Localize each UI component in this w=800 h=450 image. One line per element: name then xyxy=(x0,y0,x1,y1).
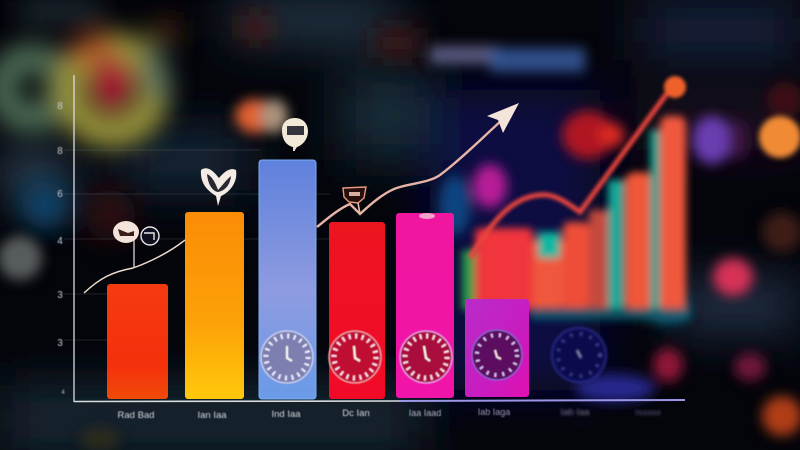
x axis labels: Ind Iaa xyxy=(271,409,301,420)
y axis ticks and labels xyxy=(57,101,330,396)
highlight on magenta bar xyxy=(419,213,435,219)
bar 2: orange xyxy=(185,212,244,399)
clock on crimson bar xyxy=(329,331,381,383)
y axis ticks and labels: 4 xyxy=(57,236,63,247)
blurred x axis labels: Iaaaaa xyxy=(635,407,661,417)
y axis ticks and labels: 6 xyxy=(57,189,63,200)
y axis ticks and labels: 8 xyxy=(57,101,63,112)
axes xyxy=(74,75,685,402)
bar 3: blue xyxy=(259,160,316,399)
clock on blue bar xyxy=(261,331,313,383)
clock on purple bar xyxy=(472,330,522,380)
blurred x axis labels: Iab Iaa xyxy=(560,407,590,418)
icon: heart marker above bar 2 xyxy=(201,168,236,206)
trend line with arrowhead xyxy=(317,103,519,227)
icon: marker above bar 3 xyxy=(282,118,308,151)
blurred clock, no bar xyxy=(552,328,606,382)
icon: marker above bar 1 xyxy=(113,221,139,268)
x axis labels: Dc Ian xyxy=(342,408,370,419)
blurred trend line with end dot xyxy=(470,76,686,258)
trend line, left segment xyxy=(84,240,185,293)
blurred ring, top left xyxy=(2,0,420,241)
blurred background bar chart xyxy=(462,116,690,320)
y axis ticks and labels: 3 xyxy=(57,338,63,349)
bar 4: crimson xyxy=(329,222,385,399)
blurred x axis labels xyxy=(560,407,661,418)
y axis ticks and labels: 8 xyxy=(57,146,63,157)
clock on magenta bar xyxy=(400,331,452,383)
y axis ticks and labels: 4 xyxy=(61,390,65,396)
x axis labels: Iaa Iaad xyxy=(409,408,441,418)
x axis labels xyxy=(118,407,510,421)
bar 6: purple xyxy=(465,299,529,397)
y axis ticks and labels: 3 xyxy=(57,290,63,301)
icon: small dark badge xyxy=(141,227,159,245)
icon: marker above bar 4 xyxy=(343,187,366,214)
bar 5: magenta xyxy=(396,213,454,398)
x axis labels: Ian Iaa xyxy=(197,410,227,421)
x axis labels: Rad Bad xyxy=(118,410,154,421)
x axis labels: Iab Iaga xyxy=(478,407,510,417)
bar 1: red xyxy=(107,284,168,399)
